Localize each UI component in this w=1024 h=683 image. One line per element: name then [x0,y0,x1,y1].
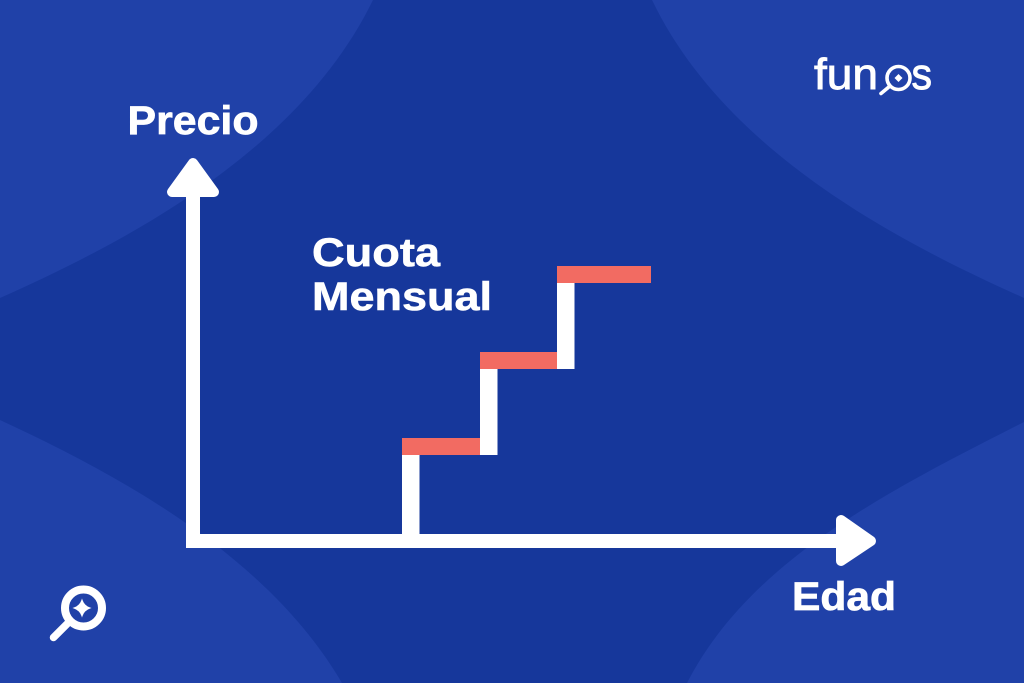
red treads [402,266,651,455]
x axis arrow [186,520,871,561]
label: Cuota Mensual [312,231,492,319]
step chart: monthly fee staircase [402,266,651,535]
logo: funos: s [912,50,932,99]
y axis arrow [172,163,214,548]
logo: funos: fun [814,50,878,99]
icon: magnifying glass [54,590,102,638]
logo: funos [814,50,932,99]
label: Edad: Edad [792,575,896,619]
label: Cuota Mensual: Cuota [312,231,441,275]
label: Cuota Mensual: Mensual [312,275,492,319]
label: Precio: Precio [128,99,258,143]
white risers [402,283,574,535]
